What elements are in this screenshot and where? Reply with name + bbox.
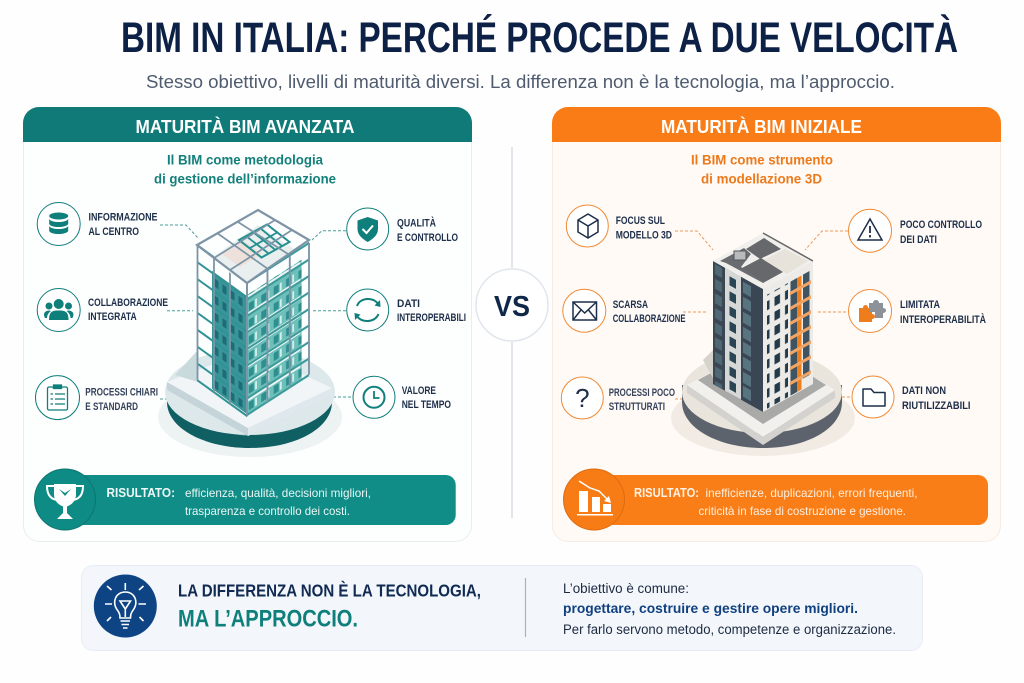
panel header: avanzata: MATURITÀ BIM AVANZATA xyxy=(136,116,354,137)
result bar: iniziale: criticità in fase di costruzione e gestione. xyxy=(698,504,906,518)
item: qualità e controllo xyxy=(347,208,458,250)
item: processi poco strutturati: STRUTTURATI xyxy=(609,401,665,413)
panel subtitle: avanzata: Il BIM come metodologia xyxy=(167,152,323,168)
panel header: avanzata xyxy=(23,107,472,142)
item: qualità e controllo: QUALITÀ xyxy=(397,217,436,230)
building: open frame model xyxy=(158,210,342,457)
item: focus sul modello 3d: MODELLO 3D xyxy=(616,230,672,242)
item: processi chiari e standard: PROCESSI CHIARI xyxy=(85,387,158,399)
item: valore nel tempo xyxy=(353,376,451,418)
item: poco controllo dei dati: DEI DATI xyxy=(900,234,937,246)
item: processi chiari e standard: E STANDARD xyxy=(85,401,138,413)
connector lines: iniziale xyxy=(675,231,852,399)
item: processi poco strutturati: ? xyxy=(575,383,590,413)
item: limitata interoperabilità: INTEROPERABILITÀ xyxy=(900,313,986,326)
panel subtitle: avanzata xyxy=(154,152,336,186)
item: dati interoperabili: INTEROPERABILI xyxy=(397,312,466,324)
item: valore nel tempo: VALORE xyxy=(402,385,436,397)
panel subtitle: avanzata: di gestione dell’informazione xyxy=(154,170,336,186)
item: dati interoperabili xyxy=(347,289,466,331)
panel header: iniziale: MATURITÀ BIM INIZIALE xyxy=(661,116,862,137)
panel subtitle: iniziale xyxy=(691,152,833,186)
item: dati non riutilizzabili: RIUTILIZZABILI xyxy=(902,400,970,412)
subtitle: Stesso obiettivo, livelli di maturità diversi. La differenza non è la tecnologia, ma l’approccio. xyxy=(146,72,895,92)
right facade xyxy=(763,261,813,412)
panel: conclusione xyxy=(82,566,922,650)
statement xyxy=(178,580,481,633)
item: collaborazione integrata: INTEGRATA xyxy=(88,311,137,323)
item: valore nel tempo: NEL TEMPO xyxy=(402,399,451,411)
result bar: avanzata xyxy=(34,469,456,530)
result bar: iniziale: inefficienze, duplicazioni, errori frequenti, xyxy=(706,486,918,500)
result bar: avanzata: trasparenza e controllo dei costi. xyxy=(185,504,350,518)
statement: MA L’APPROCCIO. xyxy=(178,606,358,633)
roof xyxy=(713,233,813,289)
statement: LA DIFFERENZA NON È LA TECNOLOGIA, xyxy=(178,580,481,601)
item: processi chiari e standard xyxy=(36,376,158,420)
item: collaborazione integrata: COLLABORAZIONE xyxy=(88,297,168,309)
item: scarsa collaborazione xyxy=(563,289,686,332)
item: focus sul modello 3d: FOCUS SUL xyxy=(616,215,665,227)
result bar: iniziale: RISULTATO: xyxy=(634,486,699,500)
item: informazione al centro: INFORMAZIONE xyxy=(88,212,158,224)
explanation: Per farlo servono metodo, competenze e organizzazione. xyxy=(563,622,896,637)
item: scarsa collaborazione: SCARSA xyxy=(613,299,648,311)
panel: maturità iniziale xyxy=(552,107,1001,542)
item: poco controllo dei dati xyxy=(848,209,982,252)
item: limitata interoperabilità: LIMITATA xyxy=(900,299,940,311)
item: collaborazione integrata xyxy=(37,288,168,332)
right facade xyxy=(247,243,309,415)
panel: maturità avanzata xyxy=(23,107,472,542)
item: scarsa collaborazione: COLLABORAZIONE xyxy=(613,313,686,325)
icon: light bulb xyxy=(94,574,157,638)
left facade xyxy=(197,245,247,416)
item: informazione al centro xyxy=(37,202,158,246)
item: processi poco strutturati: PROCESSI POCO xyxy=(609,387,675,399)
explanation xyxy=(563,581,896,637)
item: informazione al centro: AL CENTRO xyxy=(88,226,139,238)
left facade xyxy=(713,261,763,412)
panel subtitle: iniziale: Il BIM come strumento xyxy=(691,152,833,168)
panel header: iniziale xyxy=(552,107,1001,142)
divider with vs badge: VS xyxy=(494,291,530,323)
panel subtitle: iniziale: di modellazione 3D xyxy=(701,170,822,186)
item: poco controllo dei dati: POCO CONTROLLO xyxy=(900,219,982,231)
result bar: iniziale xyxy=(564,469,988,530)
icon: falling bar chart xyxy=(577,481,613,516)
building: finished 3d model xyxy=(671,233,855,456)
explanation: L’obiettivo è comune: xyxy=(563,581,689,596)
item: dati non riutilizzabili: DATI NON xyxy=(902,385,946,397)
explanation: progettare, costruire e gestire opere migliori. xyxy=(563,601,858,616)
item: dati non riutilizzabili xyxy=(852,376,970,418)
item: qualità e controllo: E CONTROLLO xyxy=(397,232,458,244)
item: limitata interoperabilità xyxy=(848,290,986,332)
item: dati interoperabili: DATI xyxy=(397,298,420,310)
item: focus sul modello 3d xyxy=(566,205,672,247)
divider with vs badge xyxy=(476,147,548,518)
roof frame xyxy=(197,210,309,283)
result bar: avanzata: RISULTATO: xyxy=(106,486,175,500)
item: processi poco strutturati xyxy=(561,377,675,419)
icon: trophy xyxy=(47,484,83,519)
result bar: avanzata: efficienza, qualità, decisioni migliori, xyxy=(185,486,371,500)
connector lines: avanzata xyxy=(160,225,352,399)
